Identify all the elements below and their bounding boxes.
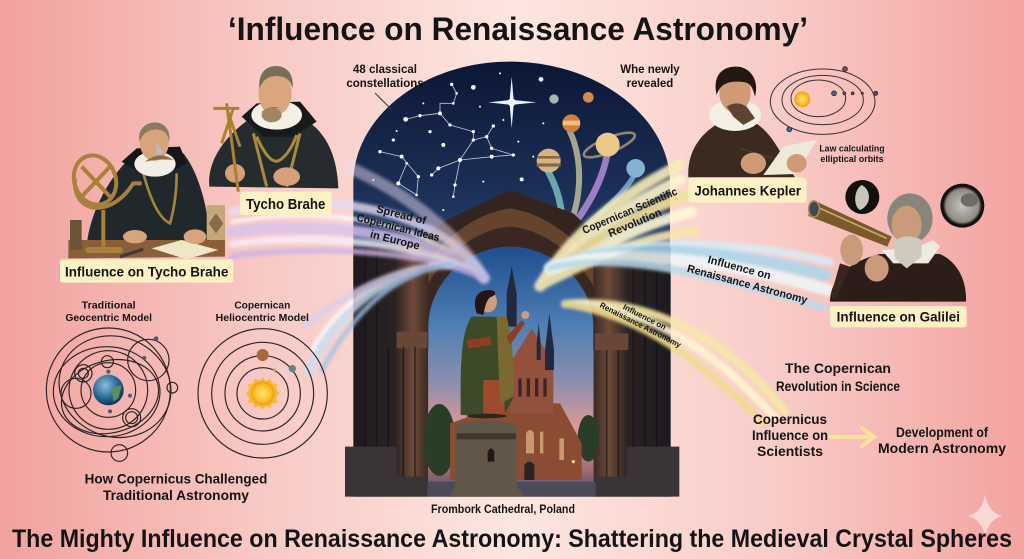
text: The Copernican Revolution in Science: The Copernican	[785, 360, 891, 376]
blue stream right	[550, 244, 830, 308]
dusk sky opening	[428, 247, 593, 497]
label: Copernican scientific revolution: Copernican Scientific	[581, 186, 679, 237]
rotated stream labels	[352, 186, 813, 350]
label: small influence on renaissance astronomy: Renaissance Astronomy	[598, 301, 683, 350]
text: law calculating elliptical orbits: Law calculating	[819, 143, 885, 153]
column flutes	[365, 247, 657, 483]
heading: How Copernicus Challenged Traditional Astronomy	[85, 470, 267, 503]
title: ‘Influence on Renaissance Astronomy’	[228, 11, 808, 47]
annotation leader line	[375, 93, 392, 110]
text: law calculating elliptical orbits: elliptical orbits	[820, 154, 884, 164]
label: Influence on Galilei: Influence on Galilei	[837, 309, 960, 325]
label: influence on renaissance astronomy: Renaissance Astronomy	[686, 263, 809, 307]
label: Tycho Brahe: Tycho Brahe	[246, 197, 325, 213]
cathedral	[450, 267, 582, 480]
annotation: 48 classical constellations: 48 classical	[353, 64, 417, 76]
purple stream	[230, 168, 484, 278]
icon: sparkle watermark	[968, 495, 1002, 537]
pedestal	[450, 420, 525, 497]
diagram: heliocentric model	[198, 329, 327, 458]
text: law calculating elliptical orbits	[819, 143, 885, 164]
label: influence on renaissance astronomy: Influence on	[706, 254, 772, 282]
diagram: elliptical orbits	[770, 67, 878, 134]
text: The Copernican Revolution in Science	[776, 360, 900, 394]
arch mouldings	[403, 208, 617, 343]
trees	[423, 404, 599, 476]
caption: Frombork Cathedral, Poland: Frombork Cathedral, Poland	[431, 502, 575, 516]
heading: How Copernicus Challenged Traditional Astronomy: Traditional Astronomy	[103, 487, 249, 503]
label: Influence on Tycho Brahe: Influence on Tycho Brahe	[65, 264, 229, 280]
portrait: Galileo	[830, 193, 966, 302]
heading: How Copernicus Challenged Traditional Astronomy: How Copernicus Challenged	[85, 470, 267, 486]
diagram: geocentric model	[45, 320, 185, 461]
label: Tycho Brahe	[240, 192, 332, 215]
label: spread of Copernican ideas: in Europe	[369, 229, 421, 253]
Copernicus statue	[461, 290, 529, 418]
label: Copernican scientific revolution: Revolution	[607, 207, 664, 240]
annotation: 48 classical constellations: constellations	[346, 78, 424, 90]
arrow	[830, 428, 874, 446]
planet trails	[548, 132, 633, 247]
text: Copernicus Influence on Scientists	[752, 411, 828, 459]
icon: full moon	[940, 184, 984, 228]
heading: Copernican Heliocentric Model	[216, 301, 309, 324]
text: Development of Modern Astronomy: Development of	[896, 424, 988, 440]
text: The Copernican Revolution in Science: Revolution in Science	[776, 378, 900, 394]
label: Influence on Tycho Brahe	[60, 259, 233, 283]
text: Development of Modern Astronomy	[878, 424, 1006, 456]
text: Copernicus Influence on Scientists: Copernicus	[753, 411, 827, 427]
text: Copernicus Influence on Scientists: Influence on	[752, 427, 828, 443]
capitals	[397, 332, 628, 350]
heading: Copernican Heliocentric Model: Copernican	[234, 301, 290, 312]
heading: Traditional Geocentric Model	[65, 301, 152, 324]
annotation: Whe newly revealed: revealed	[627, 78, 673, 90]
icon: armillary sphere	[67, 149, 142, 250]
blue stream	[306, 264, 452, 372]
label: spread of Copernican ideas: Copernican Ideas	[355, 212, 441, 244]
label: spread of Copernican ideas: Spread of	[375, 203, 428, 227]
right column	[593, 247, 671, 497]
yellow stream lower	[565, 303, 785, 424]
text: Copernicus Influence on Scientists: Scientists	[757, 443, 823, 459]
panel: Tycho Brahe portraits	[60, 66, 338, 283]
column bases	[345, 447, 679, 497]
panel: astronomical models	[45, 301, 327, 503]
central arch scene	[345, 62, 679, 497]
planets	[537, 92, 645, 178]
light streams	[230, 165, 830, 424]
icon: crescent moon	[845, 180, 879, 214]
panel: Kepler and Galileo	[688, 67, 984, 327]
heading: Traditional Geocentric Model: Geocentric Model	[65, 313, 152, 324]
label: spread of Copernican ideas	[352, 199, 444, 257]
portrait: Kepler	[688, 67, 817, 177]
annotation: Whe newly revealed: Whe newly	[620, 64, 680, 76]
label: Johannes Kepler: Johannes Kepler	[694, 182, 802, 198]
portrait: Tycho seated at desk	[68, 122, 225, 259]
annotation: 48 classical constellations	[346, 64, 424, 90]
portrait: Tycho standing	[209, 66, 338, 192]
constellations	[380, 84, 513, 197]
icon: telescope	[808, 201, 892, 247]
left column	[353, 247, 428, 497]
stars	[372, 72, 544, 211]
annotation: Whe newly revealed	[620, 64, 680, 90]
label: Johannes Kepler	[688, 177, 807, 203]
label: small influence on renaissance astronomy: Influence on	[621, 302, 668, 332]
heading: Copernican Heliocentric Model: Heliocentric Model	[216, 313, 309, 324]
night sky	[353, 62, 670, 283]
ground	[427, 482, 596, 497]
brick gable arch	[390, 190, 627, 350]
text: Development of Modern Astronomy: Modern Astronomy	[878, 440, 1006, 456]
heading: Traditional Geocentric Model: Traditional	[82, 301, 136, 312]
yellow stream upper	[540, 165, 695, 286]
